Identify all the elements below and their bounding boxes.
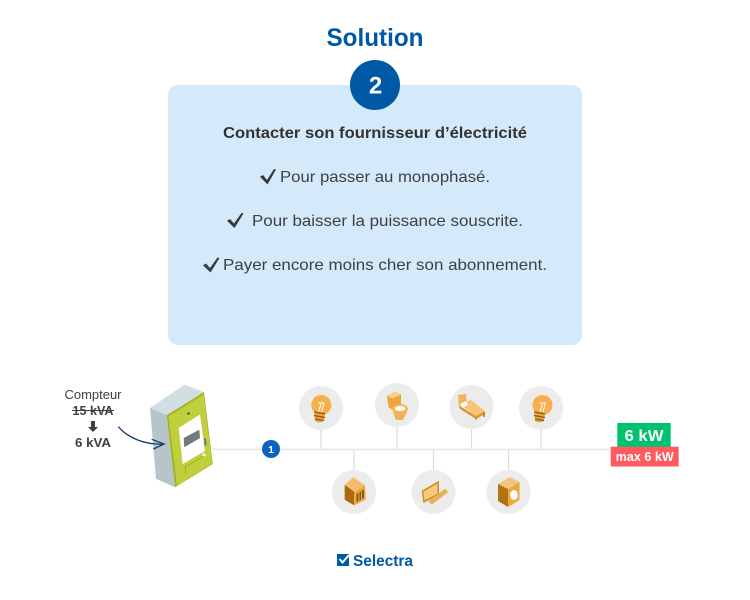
icon: washing machine <box>486 470 530 514</box>
list item 2: Pour baisser la puissance souscrite. <box>252 213 523 230</box>
meter label <box>64 388 122 450</box>
list item 1: Pour passer au monophasé. <box>280 169 490 186</box>
icon: toilet <box>375 383 419 427</box>
power line with branches <box>212 425 622 472</box>
panel heading: Contacter son fournisseur d’électricité <box>223 125 527 142</box>
meter label: 15 kVA <box>72 404 114 418</box>
power badges <box>611 423 679 466</box>
logo: Selectra: Selectra <box>353 553 413 570</box>
title: Solution <box>326 24 424 52</box>
arrow to meter <box>118 427 164 449</box>
meter label: Compteur <box>64 388 122 402</box>
step number badge: 2 <box>369 72 382 100</box>
panel: solution <box>168 60 582 345</box>
icon: computer <box>412 470 456 514</box>
icon: stove <box>332 470 376 514</box>
maximum power badge: max 6 kW <box>616 450 674 464</box>
subscribed power badge: 6 kW <box>624 428 664 445</box>
step number badge <box>350 60 400 110</box>
icon: electricity meter <box>150 385 213 487</box>
icon: light bulb left <box>299 386 343 430</box>
icon: bed <box>450 385 494 429</box>
icon: light bulb right <box>519 386 563 430</box>
marker 1 <box>262 440 280 458</box>
marker 1: 1 <box>268 444 274 456</box>
meter label: 6 kVA <box>75 436 111 450</box>
list item 3: Payer encore moins cher son abonnement. <box>223 257 547 274</box>
